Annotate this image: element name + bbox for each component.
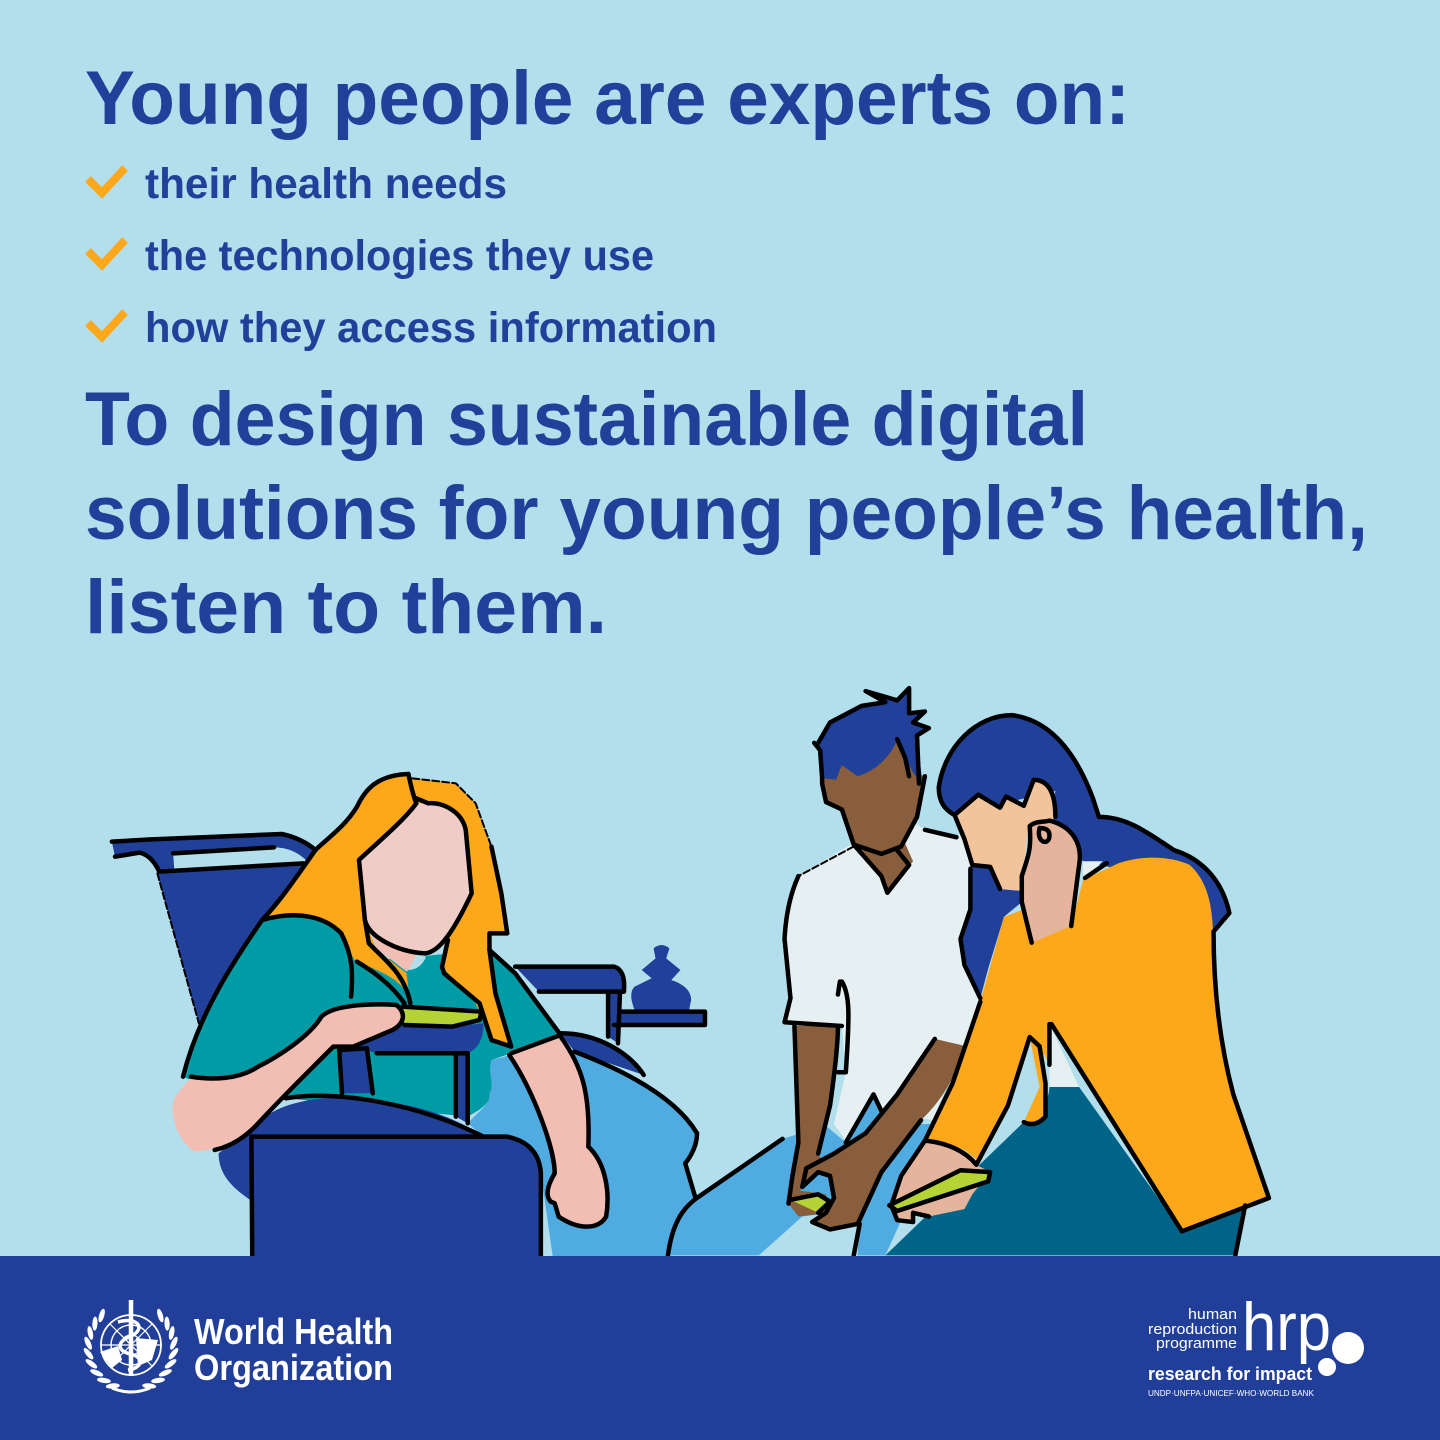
illustration: young woman in wheelchair: [112, 774, 705, 1257]
illustration: young man and young woman with phones: [668, 688, 1269, 1255]
logo: HRP: UNDP·UNFPA·UNICEF·WHO·WORLD BANK: [1148, 1389, 1315, 1398]
logo: HRP: research for impact: [1148, 1364, 1312, 1384]
icon: check 1: [88, 168, 125, 193]
list item 1: their health needs: [145, 160, 507, 208]
logo: World Health Organization: [82, 1300, 393, 1392]
logo: HRP: hrp: [1242, 1289, 1331, 1365]
footer band: [0, 1256, 1440, 1440]
main message: [85, 377, 1368, 650]
checklist: [88, 160, 717, 352]
logo: HRP: human: [1188, 1306, 1237, 1323]
main message: listen to them.: [85, 565, 607, 650]
main message: solutions for young people’s health,: [85, 471, 1368, 556]
logo: HRP: programme: [1156, 1335, 1237, 1352]
logo: World Health Organization: Organization: [194, 1347, 393, 1388]
logo: HRP: reproduction: [1148, 1321, 1237, 1338]
list item 3: how they access information: [145, 304, 717, 352]
list item 2: the technologies they use: [145, 232, 654, 280]
logo: HRP: [1148, 1289, 1364, 1398]
title: Young people are experts on:: [85, 56, 1130, 141]
icon: WHO emblem: [82, 1300, 180, 1392]
wordmark: World Health: [194, 1311, 393, 1352]
icon: check 3: [88, 312, 125, 337]
main message: To design sustainable digital: [85, 377, 1088, 462]
icon: check 2: [88, 240, 125, 265]
